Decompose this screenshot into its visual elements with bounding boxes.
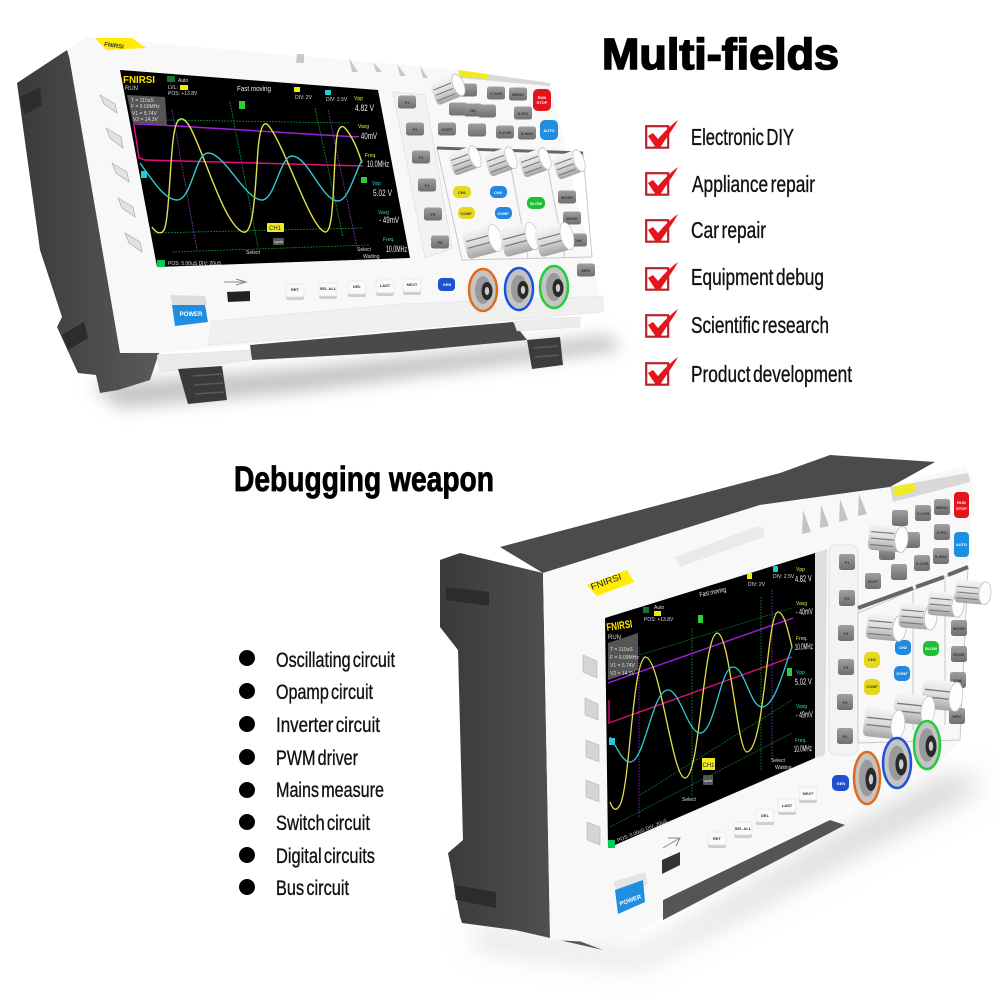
run stop button: STOP: [956, 506, 967, 511]
measure box: V2 = 14.3V: [610, 671, 636, 677]
F buttons: F6: [843, 734, 848, 739]
check item: Scientific research: [646, 309, 829, 338]
bullet: Inverter circuit: Inverter circuit: [276, 714, 380, 737]
heading: Debugging weapon: Debugging weapon: [234, 460, 494, 499]
F buttons: [398, 96, 449, 248]
coloured channel buttons: [864, 640, 939, 695]
check item: Product development: [646, 357, 852, 387]
header readouts: Fast moving: [699, 586, 727, 599]
right column buttons: [558, 190, 595, 276]
BNC connectors: [469, 266, 568, 311]
screen background: [120, 70, 410, 267]
header readouts: DIV: 2.5V: [773, 574, 795, 580]
yellow brand label: [95, 38, 146, 51]
carrying handle recess: [675, 527, 765, 567]
control buttons: S-WAV: [935, 554, 948, 559]
run stop button: RUN: [957, 500, 966, 505]
right column buttons: MPK: [582, 268, 591, 273]
header readouts: POS: +13.8V: [644, 617, 674, 623]
stand foot left: [178, 366, 227, 404]
F-key bay: [393, 92, 452, 258]
F buttons: F1: [845, 560, 850, 565]
purple trace: [608, 618, 793, 683]
brand and run status: [606, 618, 633, 641]
coloured channel buttons: CH1: [458, 190, 467, 195]
control buttons: S-WAV: [521, 131, 534, 136]
F-key panel: [393, 92, 452, 258]
dark underside: [663, 820, 845, 920]
grid lines: [610, 590, 792, 827]
bottom status bar: Waiting: [775, 765, 792, 771]
bullet: Mains measure: [239, 779, 384, 802]
control buttons: [438, 84, 536, 140]
bullet: Switch circuit: Switch circuit: [276, 812, 370, 835]
bottom status bar: Select: [246, 250, 261, 256]
BNC blue channel: [883, 738, 911, 788]
coloured channel buttons: SLOW: [530, 201, 542, 206]
check item: Equipment debug: Equipment debug: [691, 264, 824, 290]
check item: Car repair: [646, 214, 766, 243]
heading: Multi-fields: Multi-fields: [602, 30, 839, 79]
dark side housing: [440, 553, 603, 950]
yellow brand label: FNIRSI: [589, 572, 623, 592]
BNC connectors: [854, 721, 940, 804]
run stop button: RUN: [538, 95, 546, 100]
measure box: [127, 95, 167, 125]
measure box: F = 9.09MHz: [610, 655, 639, 661]
right measurements column: - 49mV: [379, 215, 399, 225]
bullet: Opamp circuit: Opamp circuit: [276, 681, 373, 704]
right measurements column: Vpp: [796, 567, 805, 573]
bullet: Switch circuit: [239, 812, 370, 835]
header readouts: Fast moving: [237, 86, 271, 93]
screen bevel: [815, 549, 827, 758]
right measurements column: [794, 567, 813, 754]
CH1 tag: [267, 223, 284, 245]
F buttons: F2: [413, 127, 418, 132]
right measurements column: 10.0MHz: [795, 641, 813, 652]
bullet: Digital circuits: Digital circuits: [276, 845, 375, 868]
coloured channel buttons: CONF: [497, 211, 509, 216]
F buttons: [837, 554, 855, 744]
bullet list: debugging uses: [239, 649, 395, 900]
brand and run status: FNIRSI: [606, 618, 633, 634]
F-key panel: [829, 545, 858, 755]
auto button: [540, 120, 558, 140]
soft keys row: LAST: [782, 803, 793, 808]
F buttons: F6: [438, 240, 443, 245]
header readouts: DIV: 2.5V: [326, 97, 348, 103]
bullet: Oscillating circuit: Oscillating circuit: [276, 649, 395, 672]
trigger markers: [609, 615, 792, 745]
bottom status bar: Select: [771, 758, 786, 764]
control buttons: S-PIC: [937, 530, 947, 535]
run stop button: STOP: [537, 100, 548, 105]
rear housing recess: [20, 87, 88, 350]
F buttons: F3: [844, 631, 849, 636]
right measurements column: Vpp: [372, 181, 381, 187]
GEN button: GEN: [837, 781, 845, 786]
ground shadow: [470, 775, 985, 965]
checklist: application fields: [646, 120, 852, 387]
GEN button: [438, 278, 455, 291]
right measurements column: Freq.: [365, 153, 377, 159]
right measurements column: 5.02 V: [373, 188, 392, 198]
model strip: [890, 473, 970, 502]
coloured channel buttons: CONF: [460, 211, 472, 216]
brand and run status: RUN: [608, 635, 621, 641]
power button: POWER: [180, 312, 203, 318]
CH1 tag: CH1: [269, 226, 282, 232]
white front body: [68, 37, 603, 353]
control buttons: S-PIC: [518, 111, 528, 116]
GEN button: [832, 775, 849, 791]
soft keys row: DEL: [353, 284, 362, 289]
soft keys row: NEXT: [407, 282, 418, 287]
auto button: AUTO: [543, 128, 555, 133]
F-key bay: [829, 545, 858, 755]
cyan sine wave: [610, 647, 792, 762]
lower lip shadow: [208, 296, 603, 345]
soft keys row: [286, 279, 421, 300]
bullet: Mains measure: Mains measure: [276, 779, 384, 802]
check item: Car repair: Car repair: [691, 217, 766, 243]
right column buttons: [949, 620, 967, 724]
BNC green channel: [914, 721, 940, 769]
coloured channel buttons: CONF: [896, 671, 908, 676]
screen 2: [605, 553, 815, 848]
coloured channel buttons: CH2: [494, 190, 503, 195]
BNC blue channel: [505, 268, 533, 310]
control buttons: Y-CUR: [490, 91, 502, 96]
soft keys row: [708, 787, 817, 848]
left stand bracket: [157, 350, 252, 372]
brand and run status: [123, 75, 155, 92]
measure box: T = 110uS: [131, 98, 154, 104]
right measurements column: - 40mV: [357, 131, 377, 141]
measure box: T = 110uS: [610, 647, 633, 653]
bullet: Inverter circuit: [239, 714, 380, 737]
F buttons: F3: [419, 155, 424, 160]
side handle tabs: [583, 655, 600, 845]
white front body: [543, 465, 973, 943]
control buttons: MENU: [512, 92, 524, 97]
F buttons: F4: [844, 665, 849, 670]
bullet: Bus circuit: [239, 877, 349, 900]
side recess bottom: [454, 885, 496, 908]
GEN button: GEN: [443, 282, 451, 287]
header readouts: Auto: [654, 605, 665, 611]
brand and run status: FNIRSI: [123, 75, 155, 86]
right measurements column: - 40mV: [796, 606, 813, 617]
right measurements column: Vavg: [796, 704, 807, 710]
header readouts: Auto: [178, 78, 189, 84]
right measurements column: - 49mV: [796, 709, 813, 720]
soft keys row: DEL: [761, 813, 770, 818]
right measurements column: Vavg: [358, 124, 369, 130]
pink trace: [134, 125, 363, 166]
right measurements column: 4.82 V: [795, 573, 812, 584]
check item: Product development: Product development: [691, 361, 852, 387]
coloured channel buttons: SLOW: [925, 646, 937, 651]
soft keys row: RET: [291, 287, 300, 292]
BNC orange channel: [854, 752, 880, 804]
bullet: Opamp circuit: [239, 681, 373, 704]
control buttons: MENU: [936, 505, 948, 510]
CH1 tag: cycle: [703, 778, 713, 783]
rotary knobs: [429, 72, 588, 260]
auto button: AUTO: [956, 542, 967, 547]
check item: Appliance repair: [646, 167, 815, 197]
header readouts: POS: +13.8V: [168, 91, 198, 97]
check item: Electronic DIY: Electronic DIY: [691, 124, 794, 150]
BNC orange channel: [469, 269, 497, 311]
soft keys row: RET: [713, 836, 722, 841]
pink trace: [609, 657, 792, 723]
measure box: V1 = 5.74V: [132, 111, 158, 117]
header readouts: DIV: 2V: [295, 95, 313, 101]
measure box: [608, 633, 639, 680]
cyan sine wave: [140, 153, 362, 201]
right column buttons: MODE: [561, 195, 573, 200]
power button: [170, 295, 208, 326]
CH1 tag: CH1: [702, 763, 715, 769]
right measurements column: Freq.: [383, 237, 395, 243]
right column buttons: CHK: [954, 678, 962, 683]
side recess top: [446, 587, 489, 606]
bullet: Oscillating circuit: [239, 649, 395, 672]
check item: Electronic DIY: [646, 120, 794, 150]
control buttons: OK: [470, 108, 476, 113]
top vent bumps: [802, 494, 867, 534]
screen 1: [120, 70, 410, 267]
soft keys row: SEL ALL: [320, 286, 337, 291]
right measurements column: 4.82 V: [355, 103, 374, 113]
run stop button: [533, 89, 551, 111]
bottom status bar: Waiting: [363, 254, 380, 260]
right column buttons: EDGE: [566, 216, 578, 221]
check item: Scientific research: Scientific research: [691, 312, 829, 338]
top vent bumps: [296, 54, 428, 78]
right measurements column: Freq.: [796, 636, 808, 642]
yellow brand label: [587, 570, 634, 596]
oscilloscope 1: tilted on stand: [17, 37, 620, 408]
right measurements column: Vpp: [354, 96, 363, 102]
auto button: [954, 532, 969, 557]
right column buttons: MPK: [953, 714, 962, 719]
control buttons: [865, 499, 950, 589]
USB port: [224, 279, 250, 302]
bullet: PWM driver: PWM driver: [276, 747, 358, 770]
yellow sine wave: [610, 612, 792, 809]
coloured channel buttons: CONF: [866, 684, 878, 689]
right column buttons: MODE: [953, 626, 965, 631]
USB port: [662, 838, 680, 874]
header readouts: [643, 566, 795, 623]
BNC green channel: [540, 266, 568, 308]
F buttons: F5: [843, 700, 848, 705]
check item: Appliance repair: Appliance repair: [692, 171, 815, 197]
channel section panel: [858, 567, 968, 743]
right measurements column: Vavg: [796, 601, 807, 607]
bottom status bar: POS: 0.00uS DIV: 20uS: [617, 818, 669, 844]
F buttons: F4: [425, 183, 430, 188]
right measurements column: 5.02 V: [795, 676, 812, 687]
right column buttons: EDGE: [953, 652, 965, 657]
trace grid lines: [153, 102, 370, 252]
check item: Equipment debug: [646, 262, 824, 290]
soft keys row: SEL ALL: [735, 826, 752, 831]
right measurements column: Freq.: [795, 738, 807, 744]
control buttons: X-CUR: [916, 561, 928, 566]
soft keys row: LAST: [380, 283, 391, 288]
trigger markers: [141, 101, 367, 183]
run stop button: [954, 492, 969, 518]
F buttons: F1: [405, 100, 410, 105]
bottom status bar: POS: 5.00uS DIV: 20uS: [168, 261, 222, 267]
bottom status bar: [608, 758, 792, 848]
channel section panel: [437, 148, 592, 260]
bottom status bar: Select: [682, 797, 697, 803]
header readouts: DIV: 2V: [748, 582, 766, 588]
coloured channel buttons: CH1: [868, 657, 877, 662]
bullet: Digital circuits: [239, 845, 375, 868]
oscilloscope 2: angled view: [440, 455, 992, 965]
control buttons: SCRT: [868, 579, 879, 584]
F buttons: F2: [845, 596, 850, 601]
power button: [613, 872, 648, 914]
bottom status bar: [157, 247, 380, 267]
yellow brand label: FNIRSI: [104, 42, 124, 51]
CH1 tag: [702, 758, 715, 785]
measure box: V1 = 5.74V: [610, 663, 636, 669]
side handle tabs: [100, 95, 142, 252]
power button: POWER: [619, 894, 643, 908]
model strip: [458, 70, 550, 86]
right measurements column: 10.0MHz: [386, 244, 407, 254]
soft keys row: NEXT: [803, 791, 814, 796]
brand and run status: RUN: [125, 86, 138, 92]
screen background: [605, 553, 815, 848]
dark rear housing: [17, 50, 160, 393]
dark underside band: [250, 322, 527, 360]
CH1 tag: cycle: [274, 239, 284, 244]
header readouts: [167, 76, 348, 103]
right column buttons: CHK: [574, 238, 582, 243]
dark top panel: [500, 455, 935, 573]
measure box: F = 9.09MHz: [131, 104, 160, 110]
control buttons: Y-CUR: [917, 511, 929, 516]
right stand bracket: [513, 317, 580, 331]
coloured channel buttons: CH2: [899, 645, 908, 650]
control buttons: SCRT: [442, 127, 453, 132]
bottom status bar: Select: [357, 247, 372, 253]
rotary knobs: [863, 524, 992, 740]
right measurements column: Vavg: [378, 210, 389, 216]
right measurements column: Vpp: [796, 670, 805, 676]
right measurements column: 10.0MHz: [794, 743, 812, 754]
header readouts: LVL:: [168, 85, 178, 91]
purple trace: [133, 124, 357, 137]
yellow sine wave: [152, 119, 362, 233]
right measurements column: [354, 96, 407, 254]
measure box: V2 = 14.3V: [133, 117, 159, 123]
stand foot right: [527, 337, 563, 369]
ground shadow: [90, 335, 620, 408]
bullet: Bus circuit: Bus circuit: [276, 877, 349, 900]
control buttons: X-CUR: [499, 130, 511, 135]
right measurements column: 10.0MHz: [367, 159, 389, 169]
bullet: PWM driver: [239, 747, 358, 770]
coloured channel buttons: [453, 186, 545, 219]
F buttons: F5: [431, 212, 436, 217]
